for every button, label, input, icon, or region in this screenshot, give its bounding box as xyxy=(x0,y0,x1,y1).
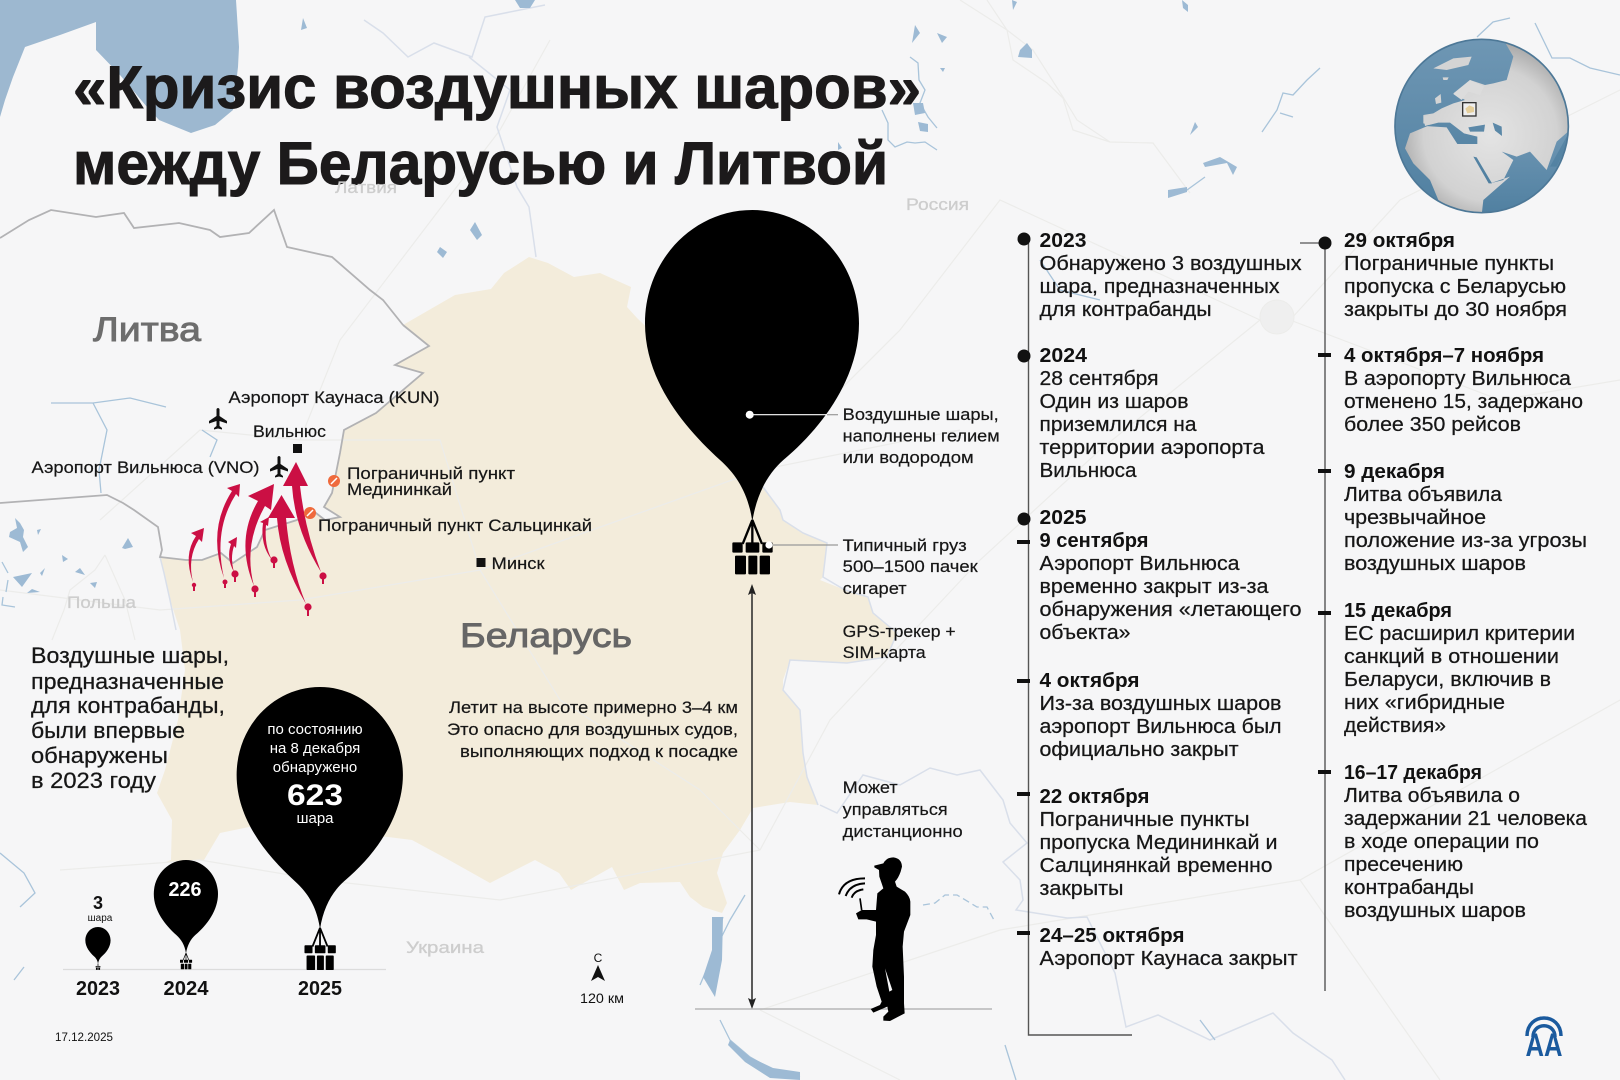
year labels: 2025 xyxy=(298,978,342,1000)
year labels: 2023 xyxy=(76,978,120,1000)
country labels xyxy=(67,178,969,957)
callout: cargo: 500–1500 пачек xyxy=(843,557,978,576)
event 4 October: Из-за воздушных шаров xyxy=(1040,693,1282,715)
text block: first detected: были впервые xyxy=(31,718,185,743)
altitude note xyxy=(447,698,738,761)
event 4 October-7 November: более 350 рейсов xyxy=(1344,414,1521,436)
country labels: Польша xyxy=(67,593,137,612)
title xyxy=(73,54,921,197)
event 2024: 2024 xyxy=(1040,345,1088,367)
remote operator xyxy=(839,778,963,1021)
logo: AA xyxy=(1526,1018,1562,1063)
balloon 2023: 3 xyxy=(93,893,103,913)
place labels xyxy=(32,388,592,573)
event 29 October: закрыты до 30 ноября xyxy=(1344,299,1567,321)
icon: Medininkai checkpoint xyxy=(328,475,340,487)
text block: first detected: Воздушные шары, xyxy=(31,643,229,668)
country labels: Беларусь xyxy=(460,617,632,655)
callout: gas: Воздушные шары, xyxy=(843,405,999,424)
event 15 December: Беларуси, включив в xyxy=(1344,669,1551,691)
event 4 October-7 November: отменено 15, задержано xyxy=(1344,391,1583,413)
place labels: Пограничный пункт xyxy=(347,464,515,483)
country labels: Литва xyxy=(93,311,201,349)
balloon 2023 xyxy=(85,893,113,970)
date: 17.12.2025 xyxy=(55,1030,113,1044)
event 4 October-7 November: В аэропорту Вильнюса xyxy=(1344,368,1572,390)
balloon 2025: шара xyxy=(296,810,334,827)
place labels: Медининкай xyxy=(347,480,452,499)
place labels: Пограничный пункт Сальцинкай xyxy=(318,516,592,535)
altitude note: Летит на высоте примерно 3–4 км xyxy=(449,698,738,717)
title: «Кризис воздушных шаров» xyxy=(73,54,921,121)
event 29 October: пропуска с Беларусью xyxy=(1344,276,1566,298)
icon: Vilnius square xyxy=(293,444,302,453)
country labels: Украина xyxy=(406,938,485,957)
event 29 October: Пограничные пункты xyxy=(1344,253,1554,275)
callout: tracker: SIM-карта xyxy=(843,643,926,662)
event 2025, 9 September xyxy=(1040,507,1302,644)
balloon 2025: 623 xyxy=(287,779,343,812)
event 4 October-7 November: 4 октября–7 ноября xyxy=(1344,345,1544,367)
remote operator: дистанционно xyxy=(843,822,963,841)
callout: cargo: сигарет xyxy=(843,579,907,598)
event 2023: для контрабанды xyxy=(1040,299,1212,321)
icon: Minsk square xyxy=(476,558,486,567)
compass and scale: 120 км xyxy=(580,990,624,1006)
Baltic Sea xyxy=(0,0,239,133)
text block: first detected xyxy=(31,643,229,793)
altitude note: выполняющих подход к посадке xyxy=(460,742,738,761)
event 2025, 9 September: 2025 xyxy=(1040,507,1086,529)
event 2025, 9 September: объекта» xyxy=(1040,622,1130,644)
red smuggling arrows xyxy=(189,462,327,616)
event 2024: Один из шаров xyxy=(1040,391,1188,413)
event 16-17 December: задержании 21 человека xyxy=(1344,808,1588,830)
Moscow area xyxy=(1260,300,1294,334)
icon: Vilnius airport plane xyxy=(270,456,288,478)
event 22 October: Салцинянкай временно xyxy=(1040,855,1272,877)
event 22 October: Пограничные пункты xyxy=(1040,809,1250,831)
event 2023 xyxy=(1040,230,1302,321)
balloon 2025 xyxy=(237,687,403,970)
callout: tracker xyxy=(843,622,956,662)
event 22 October xyxy=(1040,786,1278,900)
event 2025, 9 September: 9 сентября xyxy=(1040,530,1148,552)
compass and scale xyxy=(580,951,624,1006)
event 2023: шара, предназначенных xyxy=(1040,276,1280,298)
event 16-17 December: Литва объявила о xyxy=(1344,785,1520,807)
event 15 December: действия» xyxy=(1344,715,1446,737)
event 4 October: официально закрыт xyxy=(1040,739,1238,761)
event 2024 xyxy=(1040,345,1265,482)
panel: balloon route map xyxy=(32,388,592,616)
balloon 2025: по состоянию xyxy=(267,721,363,738)
event 9 December: Литва объявила xyxy=(1344,484,1503,506)
event 16-17 December xyxy=(1344,762,1588,922)
compass and scale: С xyxy=(594,951,603,965)
callout: cargo xyxy=(765,536,978,598)
event 24-25 October xyxy=(1040,925,1298,970)
text block: first detected: для контрабанды, xyxy=(31,693,225,718)
event 9 December: положение из-за угрозы xyxy=(1344,530,1587,552)
balloon 2024: 226 xyxy=(168,879,202,901)
balloon 2025: обнаружено xyxy=(273,759,357,776)
event 22 October: закрыты xyxy=(1040,878,1124,900)
event 29 October xyxy=(1344,230,1567,321)
event 16-17 December: в ходе операции по xyxy=(1344,831,1539,853)
icon: person with remote xyxy=(839,857,910,1021)
title: между Беларусью и Литвой xyxy=(73,130,888,197)
event 2024: Вильнюса xyxy=(1040,460,1137,482)
event 4 October: аэропорт Вильнюса был xyxy=(1040,716,1282,738)
event 16-17 December: контрабанды xyxy=(1344,877,1474,899)
globe locator xyxy=(1390,37,1570,217)
place labels: Вильнюс xyxy=(253,422,327,441)
event 15 December xyxy=(1344,600,1575,737)
event 29 October: 29 октября xyxy=(1344,230,1455,252)
balloon 2023: шара xyxy=(88,913,113,924)
rivers and lakes xyxy=(160,5,1345,1080)
panel: timeline right xyxy=(1300,230,1588,991)
event 9 December xyxy=(1344,461,1587,575)
event 2023: Обнаружено 3 воздушных xyxy=(1040,253,1302,275)
callout: tracker: GPS-трекер + xyxy=(843,622,956,641)
event 9 December: воздушных шаров xyxy=(1344,553,1526,575)
Belarus territory xyxy=(157,257,897,913)
event 15 December: них «гибридные xyxy=(1344,692,1505,714)
remote operator: Может xyxy=(843,778,898,797)
event 2024: 28 сентября xyxy=(1040,368,1158,390)
main balloon diagram xyxy=(645,210,1000,662)
event 16-17 December: пресечению xyxy=(1344,854,1463,876)
text block: first detected: предназначенные xyxy=(31,669,224,694)
event 4 October xyxy=(1040,670,1282,761)
panel: timeline left xyxy=(1017,230,1302,1035)
place labels: Аэропорт Вильнюса (VNO) xyxy=(32,458,260,477)
arrow: altitude xyxy=(695,584,992,1009)
event 2025, 9 September: обнаружения «летающего xyxy=(1040,599,1302,621)
balloon 2025: на 8 декабря xyxy=(270,740,360,757)
event 15 December: санкций в отношении xyxy=(1344,646,1559,668)
icon: Kaunas airport plane xyxy=(209,408,227,430)
event 22 October: 22 октября xyxy=(1040,786,1150,808)
logo: AA: AA xyxy=(1526,1027,1562,1063)
event 2024: территории аэропорта xyxy=(1040,437,1265,459)
event 24-25 October: 24–25 октября xyxy=(1040,925,1184,947)
text block: first detected: обнаружены xyxy=(31,743,168,768)
altitude note: Это опасно для воздушных судов, xyxy=(447,720,738,739)
event 2024: приземлился на xyxy=(1040,414,1197,436)
event 2025, 9 September: Аэропорт Вильнюса xyxy=(1040,553,1240,575)
balloon 2024 xyxy=(154,860,218,969)
event 22 October: пропуска Медининкай и xyxy=(1040,832,1278,854)
callout: cargo: Типичный груз xyxy=(843,536,967,555)
icon: Salcininkai checkpoint xyxy=(304,507,316,519)
year labels xyxy=(76,978,342,1000)
callout: gas: или водородом xyxy=(843,448,974,467)
country labels: Россия xyxy=(906,195,969,214)
place labels: Аэропорт Каунаса (KUN) xyxy=(228,388,440,407)
place labels: Минск xyxy=(492,554,545,573)
event 9 December: 9 декабря xyxy=(1344,461,1445,483)
country labels: Латвия xyxy=(335,178,397,197)
callout: gas: наполнены гелием xyxy=(843,427,1000,446)
year labels: 2024 xyxy=(164,978,209,1000)
callout: gas xyxy=(746,405,1000,467)
text block: first detected: в 2023 году xyxy=(31,768,156,793)
event 9 December: чрезвычайное xyxy=(1344,507,1486,529)
event 16-17 December: 16–17 декабря xyxy=(1344,762,1482,784)
event 16-17 December: воздушных шаров xyxy=(1344,900,1526,922)
event 24-25 October: Аэропорт Каунаса закрыт xyxy=(1040,948,1298,970)
event 2023: 2023 xyxy=(1040,230,1086,252)
chart: balloons by year xyxy=(63,687,403,1000)
event 4 October-7 November xyxy=(1344,345,1583,436)
event 15 December: ЕС расширил критерии xyxy=(1344,623,1575,645)
event 4 October: 4 октября xyxy=(1040,670,1140,692)
event 2025, 9 September: временно закрыт из-за xyxy=(1040,576,1269,598)
remote operator: управляться xyxy=(843,800,948,819)
event 15 December: 15 декабря xyxy=(1344,600,1452,622)
